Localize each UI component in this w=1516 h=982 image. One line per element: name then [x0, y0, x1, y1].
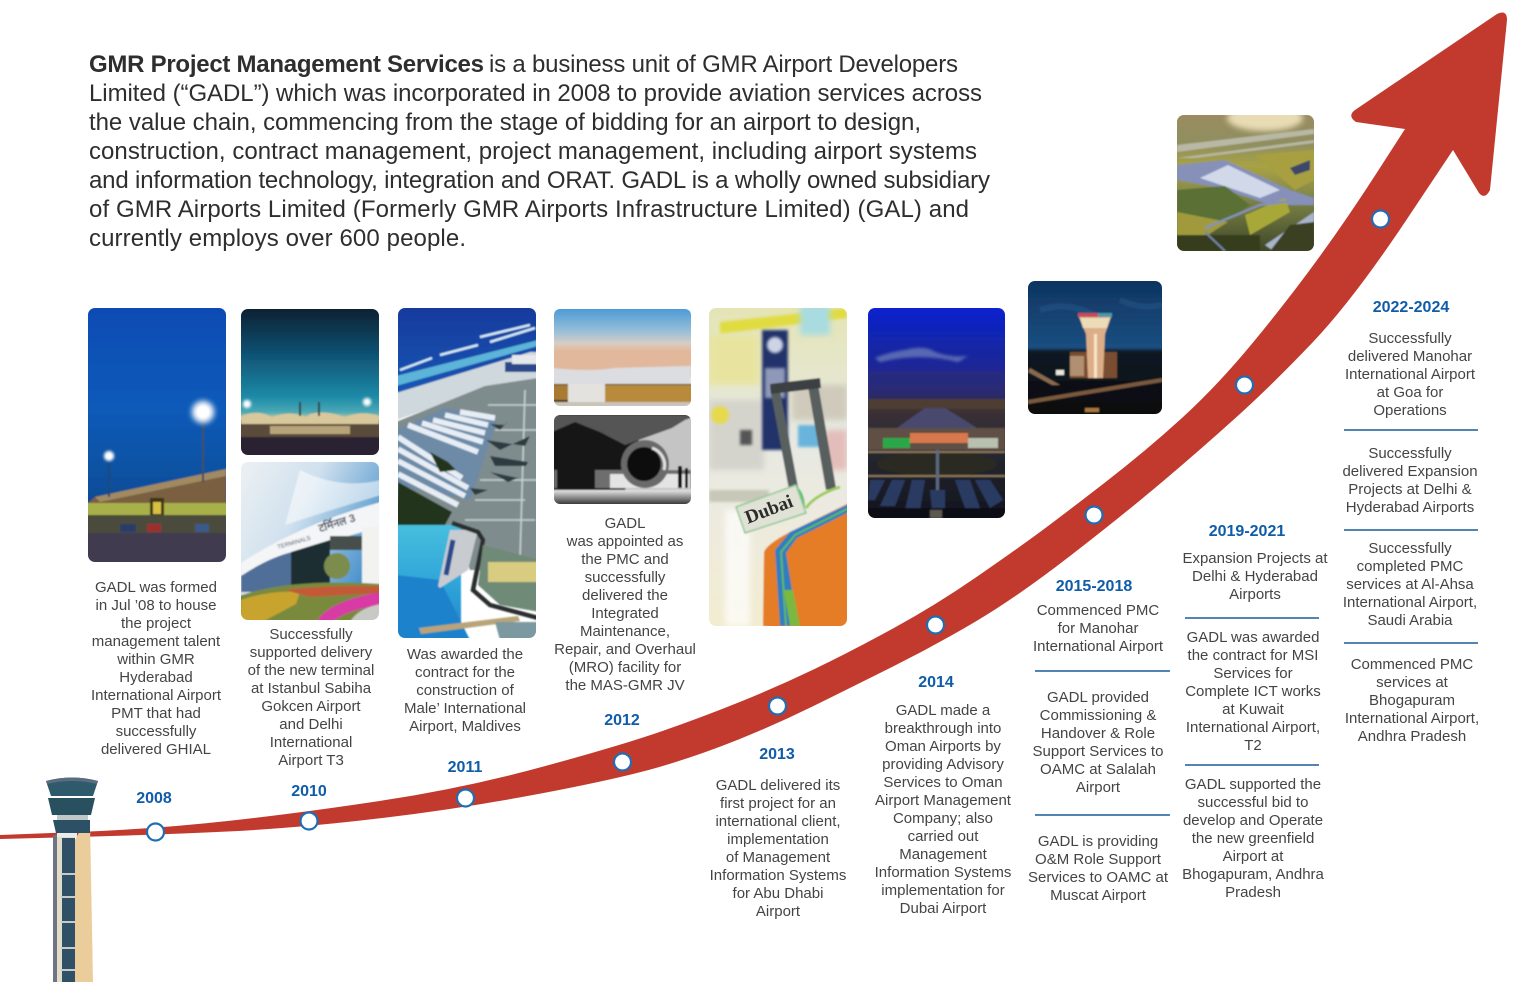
milestone 2013 [710, 746, 846, 920]
milestone 2014: GADL made a [896, 702, 991, 719]
milestone 2019-2021: International Airport, [1186, 719, 1320, 736]
milestone 2019-2021: successful bid to [1198, 794, 1308, 811]
milestone 2019-2021: Airport at [1223, 848, 1284, 865]
milestone 2012: delivered the [582, 587, 668, 604]
milestone 2022-2024 [1342, 299, 1479, 745]
milestone 2015-2018: OAMC at Salalah [1040, 761, 1156, 778]
milestone 2022-2024: Saudi Arabia [1367, 612, 1453, 629]
milestone 2008: GADL was formed [95, 579, 217, 596]
milestone 2012: 2012 [604, 712, 640, 729]
milestone 2010: Successfully [269, 626, 353, 643]
milestone 2014: breakthrough into [885, 720, 1001, 737]
intro paragraph: is a business unit of GMR Airport Developers [489, 51, 958, 78]
intro paragraph: Limited (“GADL”) which was incorporated in 2008 to provide aviation services across [89, 80, 982, 107]
milestone 2011 [404, 646, 526, 776]
milestone 2014: Management [899, 846, 988, 863]
milestone 2015-2018: for Manohar [1058, 620, 1138, 637]
milestone 2013: GADL delivered its [716, 777, 840, 794]
milestone 2012: Repair, and Overhaul [554, 641, 696, 658]
photo: Dubai suitcase [707, 305, 849, 628]
milestone 2022-2024: Operations [1373, 402, 1447, 419]
milestone 2019-2021: at Kuwait [1222, 701, 1285, 718]
milestone 2022-2024: Successfully [1368, 540, 1452, 557]
photo: airport terminal at sunset [552, 307, 693, 408]
milestone 2012: (MRO) facility for [569, 659, 681, 676]
milestone 2008: the project [121, 615, 192, 632]
milestone 2010: International [270, 734, 352, 751]
photo: Delhi terminal 3: TERMINALS [277, 536, 312, 551]
photo: Hyderabad airport at dusk [86, 306, 228, 564]
photo: Delhi terminal 3 [239, 460, 381, 622]
milestone 2008 [91, 579, 222, 807]
milestone 2011: construction of [416, 682, 515, 699]
intro paragraph: and information technology, integration and ORAT. GADL is a wholly owned subsidiary [89, 167, 990, 194]
milestone 2015-2018: International Airport [1033, 638, 1164, 655]
milestone 2015-2018: Commissioning & [1040, 707, 1156, 724]
milestone 2022-2024: Projects at Delhi & [1348, 481, 1472, 498]
milestone 2014: implementation for [881, 882, 1005, 899]
milestone 2012: was appointed as [566, 533, 683, 550]
milestone 2010: supported delivery [250, 644, 373, 661]
milestone 2011: Airport, Maldives [409, 718, 521, 735]
milestone 2022-2024: Successfully [1368, 330, 1452, 347]
milestone 2022-2024: Commenced PMC [1351, 656, 1473, 673]
milestone 2012: Integrated [591, 605, 659, 622]
milestone 2022-2024: Bhogapuram [1369, 692, 1455, 709]
milestone 2019-2021: Delhi & Hyderabad [1192, 568, 1318, 585]
milestone 2014 [875, 674, 1012, 917]
milestone 2012: the MAS-GMR JV [565, 677, 685, 694]
milestone 2022-2024: services at Al-Ahsa [1346, 576, 1474, 593]
milestone 2010: Gokcen Airport [261, 698, 361, 715]
milestone 2014: Company; also [893, 810, 993, 827]
milestone 2010: at Istanbul Sabiha [251, 680, 372, 697]
milestone 2014: 2014 [918, 674, 954, 691]
milestone 2022-2024: International Airport, [1343, 594, 1477, 611]
milestone 2022-2024: International Airport [1345, 366, 1476, 383]
milestone 2022-2024: Andhra Pradesh [1358, 728, 1466, 745]
intro paragraph: GMR Project Management Services [89, 51, 484, 78]
milestone 2015-2018: Handover & Role [1041, 725, 1155, 742]
milestone 2019-2021: GADL was awarded [1187, 629, 1319, 646]
milestone 2014: Airport Management [875, 792, 1012, 809]
milestone 2010: of the new terminal [248, 662, 374, 679]
photo: Sabiha Gokcen terminal [239, 307, 381, 457]
milestone 2015-2018: O&M Role Support [1035, 851, 1162, 868]
milestone 2010: Airport T3 [278, 752, 344, 769]
milestone 2015-2018 [1028, 578, 1170, 904]
milestone 2012 [554, 515, 696, 729]
milestone 2011: 2011 [448, 759, 482, 776]
milestone 2013: Information Systems [710, 867, 846, 884]
milestone 2011: Was awarded the [407, 646, 523, 663]
milestone 2010 [248, 626, 374, 800]
milestone 2019-2021: T2 [1244, 737, 1262, 754]
photo: Bhogapuram airport render [1177, 115, 1314, 251]
milestone 2019-2021: Services for [1213, 665, 1293, 682]
photo: Oman airport at night [866, 306, 1007, 520]
milestone 2011: contract for the [415, 664, 515, 681]
intro paragraph: construction, contract management, project management, including airport systems [89, 138, 977, 165]
milestone 2013: of Management [726, 849, 831, 866]
milestone 2012: the PMC and [581, 551, 669, 568]
milestone 2008: 2008 [136, 790, 172, 807]
milestone 2015-2018: Commenced PMC [1037, 602, 1159, 619]
milestone 2014: Services to Oman [883, 774, 1003, 791]
milestone 2019-2021: Bhogapuram, Andhra [1182, 866, 1325, 883]
milestone 2022-2024: Hyderabad Airports [1346, 499, 1474, 516]
photo: Male airport aerial [396, 306, 540, 645]
milestone 2008: Hyderabad [119, 669, 193, 686]
milestone 2008: PMT that had [111, 705, 201, 722]
milestone 2014: Dubai Airport [900, 900, 987, 917]
milestone 2008: delivered GHIAL [101, 741, 211, 758]
photo: Salalah control tower [1026, 279, 1164, 416]
milestone 2014: Oman Airports by [885, 738, 1001, 755]
milestone 2019-2021: develop and Operate [1183, 812, 1323, 829]
milestone 2013: first project for an [720, 795, 836, 812]
control tower illustration [46, 778, 98, 982]
milestone 2022-2024: delivered Manohar [1348, 348, 1472, 365]
intro paragraph [89, 51, 990, 252]
milestone 2014: carried out [908, 828, 979, 845]
milestone 2019-2021: the contract for MSI [1188, 647, 1318, 664]
milestone 2008: management talent [92, 633, 221, 650]
milestone 2022-2024: completed PMC [1357, 558, 1464, 575]
photo: Dubai suitcase: Dubai [742, 491, 796, 529]
milestone 2015-2018: Services to OAMC at [1028, 869, 1169, 886]
milestone 2013: for Abu Dhabi [733, 885, 823, 902]
milestone 2019-2021: Pradesh [1225, 884, 1281, 901]
photo: Delhi terminal 3: टर्मिनल 3 [316, 510, 357, 535]
milestone 2019-2021: 2019-2021 [1209, 523, 1285, 540]
milestone 2012: successfully [585, 569, 666, 586]
milestone 2008: within GMR [116, 651, 195, 668]
milestone 2008: International Airport [91, 687, 222, 704]
milestone 2015-2018: Airport [1076, 779, 1121, 796]
milestone 2019-2021: GADL supported the [1185, 776, 1321, 793]
milestone 2019-2021 [1182, 523, 1328, 901]
milestone 2013: implementation [727, 831, 829, 848]
milestone 2008: successfully [116, 723, 197, 740]
milestone 2012: Maintenance, [580, 623, 670, 640]
milestone 2013: international client, [715, 813, 841, 830]
intro paragraph: the value chain, commencing from the stage of bidding for an airport to design, [89, 109, 921, 136]
intro paragraph: currently employs over 600 people. [89, 225, 466, 252]
milestone 2019-2021: Expansion Projects at [1182, 550, 1328, 567]
milestone 2015-2018: Support Services to [1033, 743, 1163, 760]
milestone 2010: 2010 [291, 783, 327, 800]
milestone 2010: and Delhi [279, 716, 343, 733]
milestone 2022-2024: delivered Expansion [1342, 463, 1478, 480]
photo: aircraft engine maintenance hangar [552, 413, 693, 506]
milestone 2019-2021: Complete ICT works [1185, 683, 1321, 700]
milestone 2014: providing Advisory [882, 756, 1004, 773]
milestone 2022-2024: International Airport, [1345, 710, 1479, 727]
milestone 2022-2024: Successfully [1368, 445, 1452, 462]
milestone 2014: Information Systems [875, 864, 1011, 881]
milestone 2015-2018: 2015-2018 [1056, 578, 1132, 595]
milestone 2022-2024: at Goa for [1377, 384, 1443, 401]
milestone 2015-2018: GADL is providing [1038, 833, 1158, 850]
milestone 2022-2024: services at [1376, 674, 1449, 691]
milestone 2015-2018: Muscat Airport [1050, 887, 1147, 904]
milestone 2012: GADL [605, 515, 645, 532]
milestone 2011: Male’ International [404, 700, 526, 717]
milestone 2015-2018: GADL provided [1047, 689, 1149, 706]
timeline markers [147, 210, 1389, 840]
milestone 2008: in Jul ’08 to house [96, 597, 216, 614]
milestone 2013: 2013 [759, 746, 795, 763]
milestone 2022-2024: 2022-2024 [1373, 299, 1449, 316]
milestone 2019-2021: Airports [1229, 586, 1281, 603]
milestone 2013: Airport [756, 903, 801, 920]
milestone 2019-2021: the new greenfield [1192, 830, 1314, 847]
intro paragraph: of GMR Airports Limited (Formerly GMR Airports Infrastructure Limited) (GAL) and [89, 196, 969, 223]
